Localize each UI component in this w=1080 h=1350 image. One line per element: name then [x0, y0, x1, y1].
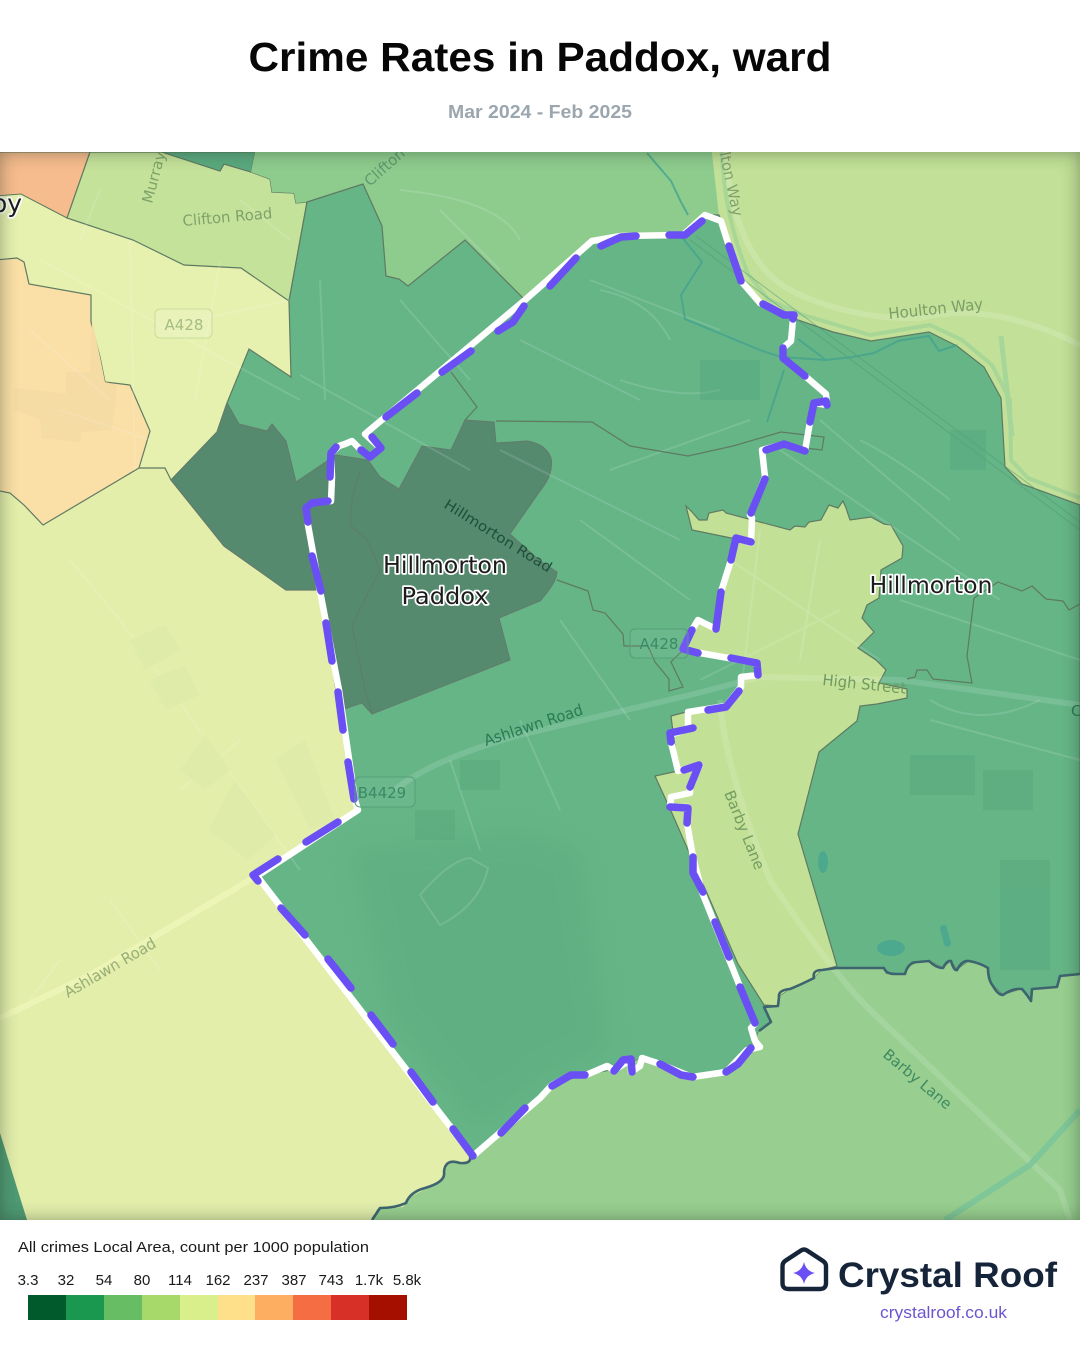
boundary lines: inner sub-areas: [350, 372, 1080, 714]
road: Barby Lane: [720, 700, 1070, 1220]
area: north-east pale green: [712, 152, 1080, 505]
area: south green: [372, 961, 1080, 1220]
website: crystalroof.co.uk: [880, 1304, 1008, 1322]
logo wordmark: Crystal Roof: [838, 1256, 1057, 1295]
road label: Ashlawn Road west: Ashlawn Road: [61, 934, 159, 1001]
fields: pale plots west: [132, 638, 275, 836]
icon: house with star: [782, 1250, 826, 1289]
legend colour scale: [28, 1295, 407, 1320]
title: Crime Rates in Paddox, ward: [248, 34, 832, 80]
road label: Houlton Way vertical: Houlton Way: [709, 121, 747, 218]
road: Ashlawn Road and High Street: [395, 677, 1080, 790]
road label: High Street: High Street: [822, 671, 907, 698]
legend values: 54: [96, 1272, 112, 1289]
area: main green ward zone: [171, 184, 1080, 1155]
place label: Hillmorton Paddox: Paddox: [402, 584, 488, 610]
road: Houlton Way: [725, 152, 1080, 345]
place label: Hillmorton Paddox: [383, 553, 507, 610]
area: orange high-crime corner: [0, 152, 90, 218]
road label: Clifton north: Clifton Road: [361, 116, 440, 190]
legend values: 5.8k: [393, 1272, 422, 1289]
area: upper-left pale zone: [0, 194, 291, 525]
road shield: B4429: B4429: [358, 784, 406, 802]
road label: Ashlawn Road east: Ashlawn Road: [482, 701, 585, 750]
legend title: All crimes Local Area, count per 1000 population: [18, 1239, 369, 1256]
road label: Barby Lane south: Barby Lane: [879, 1045, 955, 1113]
river: teal watercourse: [647, 153, 957, 422]
road shield: A428 west: [155, 309, 212, 338]
road: Houlton side track: [1001, 336, 1012, 436]
legend values: 237: [243, 1272, 269, 1289]
road: south-east motorway: [945, 1110, 1080, 1220]
boundary: pale zone southern edge: [139, 468, 171, 480]
fields: darker plots: [460, 389, 720, 790]
place label: Hillmorton east: Hillmorton: [870, 573, 992, 599]
legend values: 3.3: [18, 1272, 38, 1289]
road: Ashlawn Road west: [0, 875, 258, 1018]
place label: Hillmorton Paddox: Hillmorton: [383, 553, 507, 579]
area: Hillmorton pale pocket: [655, 501, 907, 1006]
legend values: 1.7k: [355, 1272, 384, 1289]
road: railway: [690, 236, 1080, 530]
road: Houlton edge band: [722, 152, 1080, 498]
area: peach town centre: [0, 258, 150, 525]
road label: Barby Lane north: Barby Lane: [720, 788, 768, 872]
road shield: B4429: [355, 777, 415, 807]
road label: Murray: Murray: [138, 149, 170, 205]
white ward outline: [257, 215, 827, 1156]
area: Clifton Road light green: [67, 152, 307, 301]
area: ward interior darker shading: [350, 830, 610, 1130]
legend values: [18, 1272, 422, 1289]
area: north medium green: [251, 152, 719, 300]
road label: Houlton Way: Houlton Way: [888, 295, 984, 323]
legend values: 114: [168, 1272, 192, 1289]
road label: Clifton Road: Clifton Road: [182, 204, 273, 230]
legend values: 387: [281, 1272, 307, 1289]
area: peach building footprint: [92, 321, 111, 384]
legend values: 80: [134, 1272, 150, 1289]
area: south-west dark corner: [0, 1133, 27, 1220]
roads: minor street network: [30, 190, 1080, 1000]
legend values: 162: [205, 1272, 231, 1289]
legend values: 743: [318, 1272, 344, 1289]
purple ward dashes: [253, 221, 827, 1156]
legend values: 32: [58, 1272, 74, 1289]
road label: Hillmorton Road: Hillmorton Road: [441, 497, 555, 576]
area: top dark green sliver: [162, 152, 255, 172]
logo: Crystal Roof: [782, 1250, 1057, 1322]
stream: southern boundary: [372, 961, 1080, 1220]
road shield: A428 west: A428: [165, 316, 203, 334]
road shield: A428 east: A428: [640, 635, 678, 653]
legend: [18, 1239, 422, 1320]
area: dark Hillmorton Paddox zone: [171, 403, 557, 714]
subtitle: date range: Mar 2024 - Feb 2025: [448, 101, 632, 122]
lakes: south-east ponds: [818, 851, 952, 956]
road shield: A428 east: [630, 629, 688, 658]
